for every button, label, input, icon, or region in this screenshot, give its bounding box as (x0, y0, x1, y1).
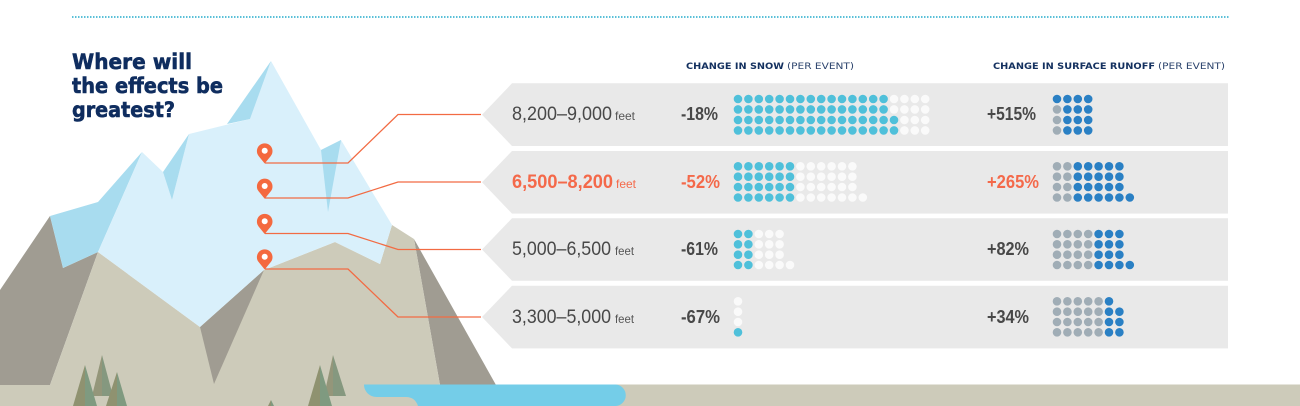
snow change value: -67% (681, 306, 720, 327)
illustration: mountain (0, 61, 496, 385)
column header: change in snow: CHANGE IN SNOW (686, 62, 785, 72)
elevation label: 6,500–8,200 (512, 171, 613, 193)
title: the effects be (72, 74, 223, 99)
elevation label: feet (615, 244, 635, 258)
title (72, 50, 223, 123)
column header: change in surface runoff: CHANGE IN SURFACE RUNOFF (993, 62, 1155, 72)
runoff change value: +82% (987, 238, 1029, 259)
snow change value: -52% (681, 171, 720, 192)
runoff dots (1057, 166, 1130, 198)
icon: location pins (257, 143, 273, 270)
title: greatest? (72, 98, 175, 123)
snow: summit facet (227, 61, 271, 124)
connector lines (265, 114, 481, 317)
snow change value: -18% (681, 103, 718, 124)
mountain: tan body (50, 225, 440, 385)
elevation label: 5,000–6,500 (512, 238, 611, 260)
snow dots (738, 99, 926, 130)
panel: 6,500–8,200 feet (highlighted) (482, 151, 1228, 214)
lake (364, 384, 626, 406)
snow dots (738, 234, 790, 265)
runoff change value: +265% (987, 171, 1039, 192)
snow: main snowcap (98, 61, 392, 327)
elevation label: feet (615, 109, 636, 123)
panel: 5,000–6,500 feet (482, 218, 1228, 281)
ground (0, 384, 1300, 406)
runoff change value: +34% (987, 306, 1029, 327)
mountain: right rock face (414, 239, 496, 385)
mountain: central crevasse (200, 270, 264, 384)
mountain: left rock face (0, 216, 98, 385)
runoff change value: +515% (987, 103, 1036, 124)
runoff dots (1057, 301, 1120, 332)
column header: change in surface runoff: (PER EVENT) (1158, 62, 1225, 72)
snow dots (738, 166, 863, 198)
elevation label: 3,300–5,000 (512, 306, 611, 328)
runoff dots (1057, 234, 1130, 265)
snow dots (734, 301, 743, 332)
elevation label: feet (615, 312, 635, 326)
elevation label: 8,200–9,000 (512, 103, 612, 125)
snow: left shaded face (50, 152, 142, 268)
title: Where will (72, 50, 192, 75)
snow: right facet (321, 140, 341, 212)
panel: 8,200–9,000 feet (482, 83, 1228, 146)
snow change value: -61% (681, 238, 718, 259)
elevation label: feet (616, 177, 637, 191)
trees (73, 355, 346, 406)
panel: 3,300–5,000 feet (482, 286, 1228, 348)
runoff dots (1057, 99, 1089, 130)
snow: left facet (163, 134, 189, 200)
column header: change in snow: (PER EVENT) (787, 62, 854, 72)
